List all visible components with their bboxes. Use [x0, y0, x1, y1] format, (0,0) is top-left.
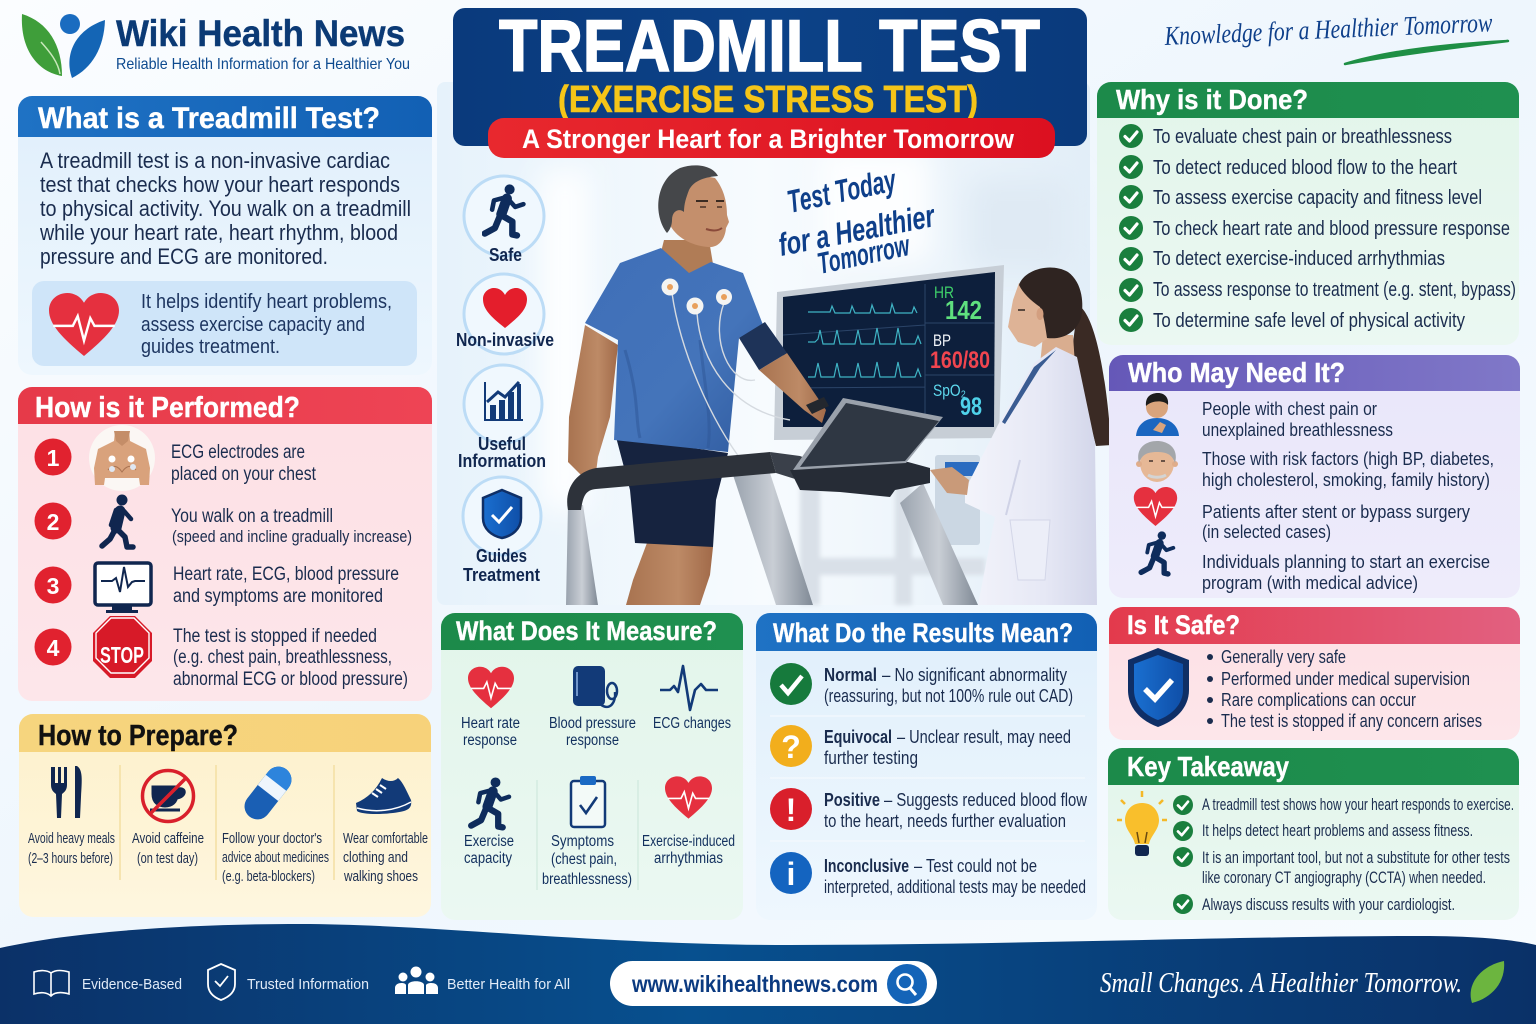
callout: heart summary	[32, 281, 417, 366]
neck	[1040, 335, 1075, 365]
face	[1008, 283, 1048, 347]
step 2: (speed and incline gradually increase)	[172, 527, 412, 546]
heading: Who May Need It?	[1128, 357, 1345, 388]
badge: Guides Treatment: Guides	[476, 546, 527, 566]
measure: blood pressure: response	[566, 732, 619, 749]
blurred clinic background	[540, 150, 1070, 510]
icon: leaf	[1471, 961, 1504, 1003]
checklist: To detect reduced blood flow to the heart	[1153, 157, 1457, 179]
step 4: STOP	[100, 642, 144, 668]
result: inconclusive: interpreted, additional tests may be needed	[824, 877, 1086, 897]
monitor: 160/80	[930, 347, 990, 374]
hand	[930, 467, 969, 495]
equipment behind	[800, 480, 985, 605]
text block: definition: while your heart rate, heart rhythm, blood	[39, 220, 398, 245]
heading: Key Takeaway	[1127, 751, 1289, 782]
hero photo illustration: patient on treadmill with doctor	[437, 82, 1112, 605]
measure: symptoms: breathlessness)	[542, 871, 632, 888]
item: avoid heavy meals	[28, 766, 115, 867]
item: runner: Individuals planning to start an exercise	[1202, 551, 1490, 572]
item: avoid caffeine	[132, 770, 204, 867]
logo: Wiki Health News: Reliable Health Information for a Healthier You	[116, 56, 410, 73]
panel: Is It Safe	[1109, 607, 1520, 740]
heading: What Does It Measure?	[456, 616, 717, 646]
result: inconclusive	[770, 852, 1086, 897]
step 3: Heart rate, ECG, blood pressure	[173, 564, 399, 585]
badge: Useful Information	[458, 365, 546, 471]
script slogan: Test Today for a Healthier Tomorrow: for a Healthier	[775, 197, 939, 263]
result: positive: Positive	[824, 790, 880, 810]
bullet list: Generally very safe	[1221, 647, 1346, 667]
bullet list: The test is stopped if any concern arises	[1221, 711, 1482, 731]
hair	[1019, 268, 1082, 338]
badge: Useful Information: Useful	[478, 434, 526, 454]
result: positive: – Suggests reduced blood flow	[884, 790, 1088, 810]
item: chest pain person	[1136, 393, 1393, 440]
item: runner	[1141, 531, 1490, 593]
step 3	[34, 563, 399, 613]
website pill: www.wikihealthnews.com	[631, 971, 878, 997]
text block: definition: test that checks how your heart responds	[40, 172, 400, 197]
item: medicines: advice about medicines	[222, 849, 329, 866]
icon: shield	[1128, 648, 1189, 727]
measure: symptoms: (chest pain,	[551, 851, 617, 868]
measure: heart rate: response	[463, 732, 517, 749]
heading: Is It Safe?	[1127, 610, 1240, 640]
measure: exercise capacity: Exercise	[464, 833, 514, 850]
measure: exercise capacity: capacity	[464, 850, 512, 867]
result: inconclusive: Inconclusive	[824, 856, 909, 876]
footer item: Better Health for All: Better Health for All	[447, 976, 570, 993]
monitor	[774, 265, 1004, 440]
badge: Safe	[464, 176, 544, 265]
patient	[568, 165, 829, 605]
heading: How is it Performed?	[35, 392, 300, 424]
measure: blood pressure	[549, 666, 636, 749]
panel: What Does It Measure	[441, 613, 743, 920]
step 4: 4	[47, 635, 60, 661]
text block: definition: A treadmill test is a non-invasive cardiac	[40, 148, 390, 173]
text block: definition: pressure and ECG are monitored.	[40, 244, 328, 269]
script slogan: Test Today for a Healthier Tomorrow: Tomorrow	[815, 229, 913, 281]
item: shoes: clothing and	[343, 849, 408, 866]
panel: How to Prepare	[19, 714, 431, 917]
feature badges	[456, 176, 554, 585]
badge: Safe: Safe	[489, 245, 522, 265]
item: avoid caffeine: (on test day)	[137, 850, 198, 867]
badge: Useful Information: Information	[458, 451, 546, 471]
electrodes and wires	[672, 293, 790, 465]
item: heart: (in selected cases)	[1202, 521, 1331, 542]
bullet list: Performed under medical supervision	[1221, 669, 1470, 689]
item: medicines	[222, 761, 329, 885]
monitor: 142	[945, 295, 982, 325]
monitor: BP	[933, 331, 951, 350]
treadmill	[566, 398, 978, 605]
step 4: (e.g. chest pain, breathlessness,	[173, 647, 392, 668]
icon: light bulb	[1117, 791, 1167, 856]
footer item: Trusted Information	[208, 964, 369, 1000]
measure: heart rate	[461, 667, 520, 749]
subtitle: (EXERCISE STRESS TEST)	[558, 79, 978, 121]
measure: exercise capacity	[464, 777, 514, 867]
item: shoes: walking shoes	[343, 868, 418, 885]
measure: symptoms: Symptoms	[551, 833, 614, 850]
heading: How to Prepare?	[38, 720, 238, 752]
ponytail	[1072, 305, 1112, 446]
result: positive	[770, 788, 1088, 831]
result: equivocal: Equivocal	[824, 727, 892, 747]
banner: tagline pill: A Stronger Heart for a Brighter Tomorrow	[522, 124, 1015, 154]
item: runner: program (with medical advice)	[1202, 572, 1418, 593]
result: inconclusive: – Test could not be	[914, 856, 1037, 876]
step 1: ECG electrodes are	[171, 442, 305, 463]
step 2: 2	[47, 509, 59, 535]
measure: arrhythmias: arrhythmias	[654, 850, 723, 867]
BP cuff	[739, 322, 787, 370]
result: positive: !	[786, 792, 796, 828]
website pill	[610, 961, 937, 1006]
step 1: 1	[47, 445, 60, 471]
monitor: HR	[934, 283, 954, 302]
heading: What Do the Results Mean?	[773, 618, 1073, 648]
item: medicines: Follow your doctor's	[222, 830, 322, 847]
item: avoid heavy meals: (2–3 hours before)	[28, 850, 113, 867]
coat	[965, 347, 1097, 605]
title block	[453, 6, 1087, 158]
item: avoid caffeine: Avoid caffeine	[132, 830, 204, 847]
item: chest pain person: unexplained breathlessness	[1202, 419, 1393, 440]
footer item: Evidence-Based	[34, 971, 182, 996]
panel: What is a Treadmill Test	[18, 96, 432, 375]
shorts	[616, 437, 728, 547]
step 3: 3	[47, 573, 59, 599]
result: equivocal: – Unclear result, may need	[897, 727, 1071, 747]
panel: What Do the Results Mean	[756, 613, 1097, 920]
item: avoid heavy meals: Avoid heavy meals	[28, 830, 115, 847]
step 2	[34, 494, 412, 547]
step 1: placed on your chest	[171, 464, 317, 485]
badge: Guides Treatment	[463, 477, 541, 585]
item: chest pain person: People with chest pain or	[1202, 398, 1377, 419]
ECG traces	[808, 304, 921, 377]
item: older man: Those with risk factors (high BP, diabetes,	[1202, 448, 1494, 469]
measure: ECG changes: ECG changes	[653, 715, 731, 732]
text block: definition: to physical activity. You walk on a treadmill	[40, 196, 411, 221]
item: heart: Patients after stent or bypass surgery	[1202, 501, 1471, 522]
step 1	[34, 425, 317, 491]
monitor: SpO₂	[933, 381, 966, 400]
measure: arrhythmias: Exercise-induced	[642, 833, 735, 850]
bullet list: Rare complications can occur	[1221, 690, 1416, 710]
item: medicines: (e.g. beta-blockers)	[222, 868, 315, 885]
neck	[661, 240, 713, 278]
checklist	[1119, 124, 1516, 332]
script slogan: Test Today for a Healthier Tomorrow: Test Today	[784, 161, 900, 220]
heading: Why is it Done?	[1116, 84, 1308, 115]
result: inconclusive: i	[787, 856, 795, 892]
doctor	[930, 268, 1112, 605]
measure: ECG changes	[653, 666, 731, 732]
callout: heart summary: It helps identify heart problems,	[141, 291, 392, 313]
footer item: Evidence-Based: Evidence-Based	[82, 976, 182, 993]
item: heart	[1134, 487, 1471, 542]
checklist: To evaluate chest pain or breathlessness	[1153, 126, 1452, 148]
checklist: To detect exercise-induced arrhythmias	[1153, 248, 1445, 270]
logo: Wiki Health News	[22, 13, 410, 78]
result: normal: (reassuring, but not 100% rule out CAD)	[824, 686, 1073, 706]
leg	[626, 535, 713, 605]
item: shoes	[343, 778, 428, 885]
panel: Who May Need It	[1109, 355, 1520, 598]
takeaway list	[1173, 795, 1514, 914]
step 2: You walk on a treadmill	[171, 506, 333, 527]
footer band	[0, 924, 1536, 1024]
callout: heart summary: assess exercise capacity and	[141, 314, 365, 336]
monitor: 98	[960, 393, 982, 421]
footer item: Trusted Information: Trusted Information	[247, 976, 369, 993]
result: equivocal: ?	[781, 729, 801, 765]
panel: How is it Performed	[18, 387, 432, 701]
bullet list	[1207, 647, 1482, 731]
item: shoes: Wear comfortable	[343, 830, 428, 847]
logo: Wiki Health News: Wiki Health News	[116, 13, 405, 54]
result: equivocal	[770, 725, 1071, 768]
measure: symptoms	[542, 776, 632, 888]
arms	[568, 325, 618, 488]
step 4	[34, 616, 408, 690]
badge: Non-invasive: Non-invasive	[456, 330, 554, 350]
measure: blood pressure: Blood pressure	[549, 715, 636, 732]
result: normal	[770, 663, 1073, 706]
item: older man	[1136, 441, 1494, 490]
script slogan: Test Today for a Healthier Tomorrow	[775, 161, 939, 281]
measure: heart rate: Heart rate	[461, 715, 520, 732]
panel: Key Takeaway	[1108, 748, 1519, 920]
head	[668, 177, 729, 247]
takeaway list: Always discuss results with your cardiologist.	[1202, 896, 1455, 914]
heading: What is a Treadmill Test?	[38, 102, 380, 135]
badge: Non-invasive	[456, 274, 554, 354]
shirt	[585, 248, 765, 452]
step 3: and symptoms are monitored	[173, 586, 383, 607]
item: older man: high cholesterol, smoking, family history)	[1202, 469, 1490, 490]
badge: Guides Treatment: Treatment	[463, 565, 540, 585]
result: normal: – No significant abnormality	[882, 665, 1067, 685]
result: positive: to the heart, needs further evaluation	[824, 811, 1066, 831]
checklist: To determine safe level of physical activity	[1153, 310, 1465, 332]
callout: heart summary: guides treatment.	[141, 336, 280, 358]
measure: arrhythmias	[642, 776, 735, 867]
step 4: abnormal ECG or blood pressure)	[173, 669, 408, 690]
footer slogan: Small Changes. A Healthier Tomorrow.	[1100, 968, 1462, 999]
icon: leaf and person logo	[22, 14, 105, 78]
title: TREADMILL TEST	[499, 6, 1040, 87]
top right tagline	[1163, 7, 1508, 64]
step 4: The test is stopped if needed	[173, 626, 377, 647]
panel: Why is it Done	[1097, 82, 1519, 345]
text block: definition	[39, 148, 411, 269]
result: equivocal: further testing	[824, 748, 918, 768]
footer item: Better Health for All	[395, 966, 570, 994]
result: normal: Normal	[824, 665, 877, 685]
